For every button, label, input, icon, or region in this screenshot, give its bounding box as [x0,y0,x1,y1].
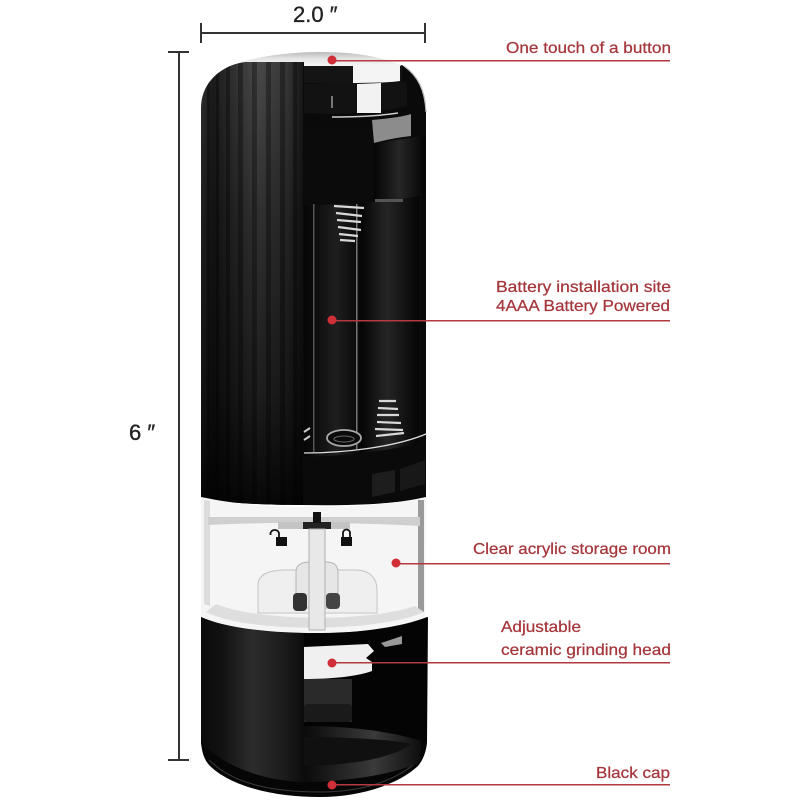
icon: top spring [334,206,364,241]
callout: clear acrylic storage room [392,541,671,568]
height dimension: 6 inches: 6 ″ [129,420,155,445]
callout: battery installation site: 4AAA Battery Powered [496,298,670,315]
battery compartment [304,196,419,457]
callout: battery installation site: Battery installation site [496,279,671,296]
icon: unlocked padlock [270,530,287,546]
upper cutaway block [304,114,425,205]
callout: clear acrylic storage room: Clear acrylic storage room [473,541,671,558]
icon: locked padlock [341,530,352,546]
callout: adjustable ceramic grinding head [328,619,671,668]
clear grinder shaft holder [258,529,377,630]
clear acrylic storage room [201,497,426,633]
upper housing: ribbed black shell [200,60,426,506]
button: chrome dome top [240,52,407,117]
infographic canvas [130,6,670,797]
icon: battery contact ring [304,428,361,446]
icon: bottom spring [375,401,404,436]
cap grooves [209,760,419,792]
callout: one touch of a button: One touch of a button [506,40,671,57]
callout: adjustable ceramic grinding head: Adjustable [501,619,581,636]
ceramic grinding head [304,636,402,722]
black cap inner opening [304,617,427,782]
compartment floor and collar [304,434,426,497]
lower black base [201,617,428,797]
callout: black cap [328,765,670,790]
callout: black cap: Black cap [596,765,670,782]
grinder product illustration [200,52,428,797]
width dimension: 2.0 inches: 2.0 ″ [293,2,338,27]
callout: battery installation site [328,279,671,324]
callout: one touch of a button [328,40,671,64]
callout: adjustable ceramic grinding head: ceramic grinding head [501,642,671,659]
